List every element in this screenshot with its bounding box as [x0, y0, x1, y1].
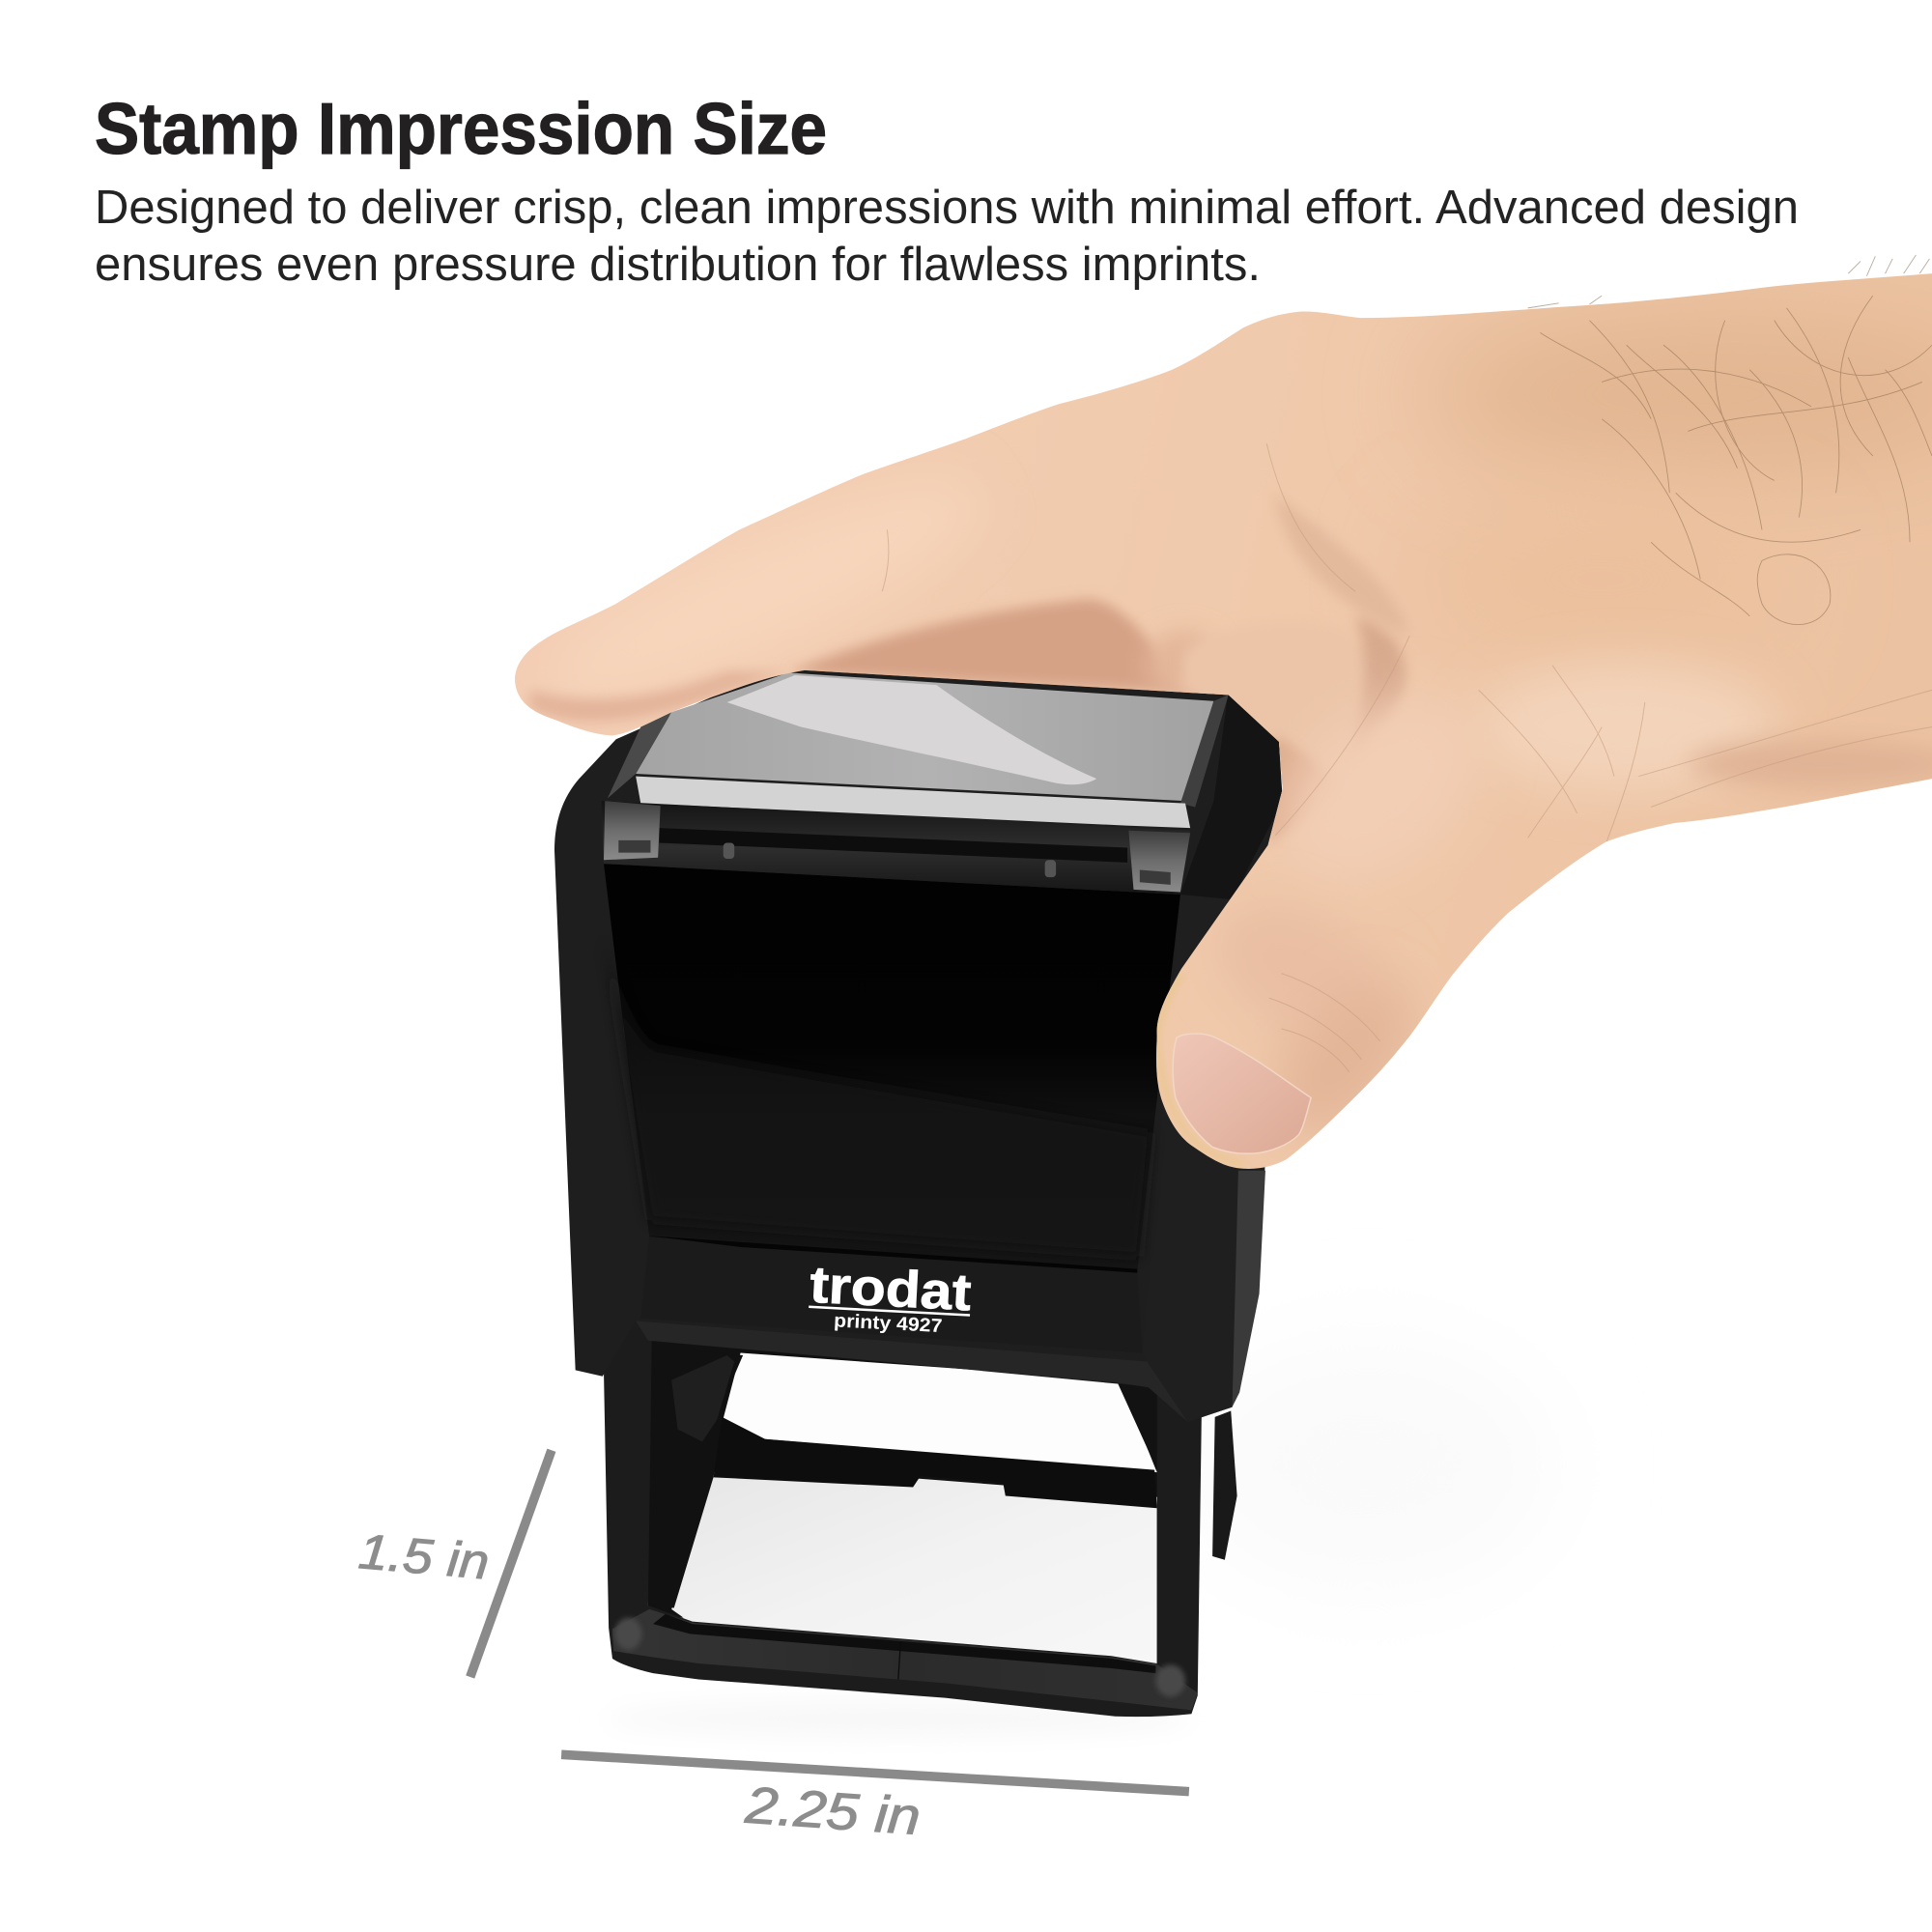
stamp: main body [554, 663, 1282, 1422]
description text: ensures even pressure distribution for flawless imprints. [95, 239, 1261, 291]
stamp: roller nubs [724, 842, 734, 859]
stamp: lower front panel [640, 1237, 1142, 1353]
stamp: cross bar [714, 1417, 1157, 1508]
stamp: frame [603, 1306, 1203, 1717]
stamp: label highlight [727, 675, 1096, 784]
hand: middle finger in shadow [788, 599, 1229, 695]
stamp: collar [636, 1321, 1188, 1422]
hand [493, 246, 1932, 1182]
dimension line: 2.25 in [561, 1754, 1189, 1792]
stamp: foot inner ridge [653, 1614, 1155, 1673]
photo: hand pressing stamp [356, 246, 1932, 1846]
stamp: roller [601, 801, 1190, 895]
hand: thumb shading [1267, 684, 1464, 867]
stamp: clear lid label [636, 672, 1213, 801]
stamp: frame opening backing [648, 1331, 1158, 1665]
stamp: right panel [1142, 801, 1247, 1422]
stamp: right hinge [1128, 831, 1190, 892]
stamp: upper window [722, 1353, 1158, 1472]
stamp: light strip [636, 777, 1190, 828]
dimension label: 2.25 in: 2.25 in [743, 1777, 923, 1846]
title: Stamp Impression Size [95, 88, 827, 169]
stamp: back post [1212, 1410, 1237, 1560]
description text [95, 182, 1799, 291]
hand: thumb nail [1173, 1034, 1311, 1153]
dimension label: 1.5 in: 1.5 in [356, 1523, 492, 1590]
hand: wrist hair fringe [1528, 255, 1929, 308]
hand: forefinger underside shade [529, 671, 788, 722]
stamp: foot face [612, 1609, 1198, 1710]
dimension line: 1.5 in [470, 1450, 552, 1677]
hand: lower arm light [1479, 666, 1775, 788]
stamp: trodat logo: printy 4927 [834, 1310, 943, 1337]
hand: forefinger light [603, 497, 952, 670]
stamp: gloss reflection [604, 936, 1152, 1257]
stamp [554, 663, 1283, 1717]
hand: arm tan shading [1430, 308, 1932, 480]
stamp: top right corner [1180, 690, 1283, 899]
stamp: glossy front panel [604, 864, 1180, 1271]
hand: palm between finger and thumb [1183, 647, 1283, 811]
stamp: foot corner highlights [614, 1618, 642, 1650]
stamp: floor seen through frame [671, 1472, 1157, 1665]
hand: arm hair [1540, 296, 1932, 625]
stamp: inner right dark edge [1117, 1380, 1157, 1472]
stamp: lid edge right [1180, 695, 1229, 807]
hand: creases [882, 443, 1932, 1072]
stamp: right side sliver [1233, 1171, 1265, 1407]
stamp: left hinge [604, 801, 661, 860]
stamp: inner left wall [648, 1337, 743, 1608]
stamp: panel seam [649, 1236, 1137, 1273]
description text: Designed to deliver crisp, clean impressions with minimal effort. Advanced design [95, 182, 1799, 234]
stamp: lid edge left [608, 712, 671, 799]
stamp: trodat logo: trodat [809, 1257, 973, 1321]
floor shadow [604, 1343, 1552, 1736]
